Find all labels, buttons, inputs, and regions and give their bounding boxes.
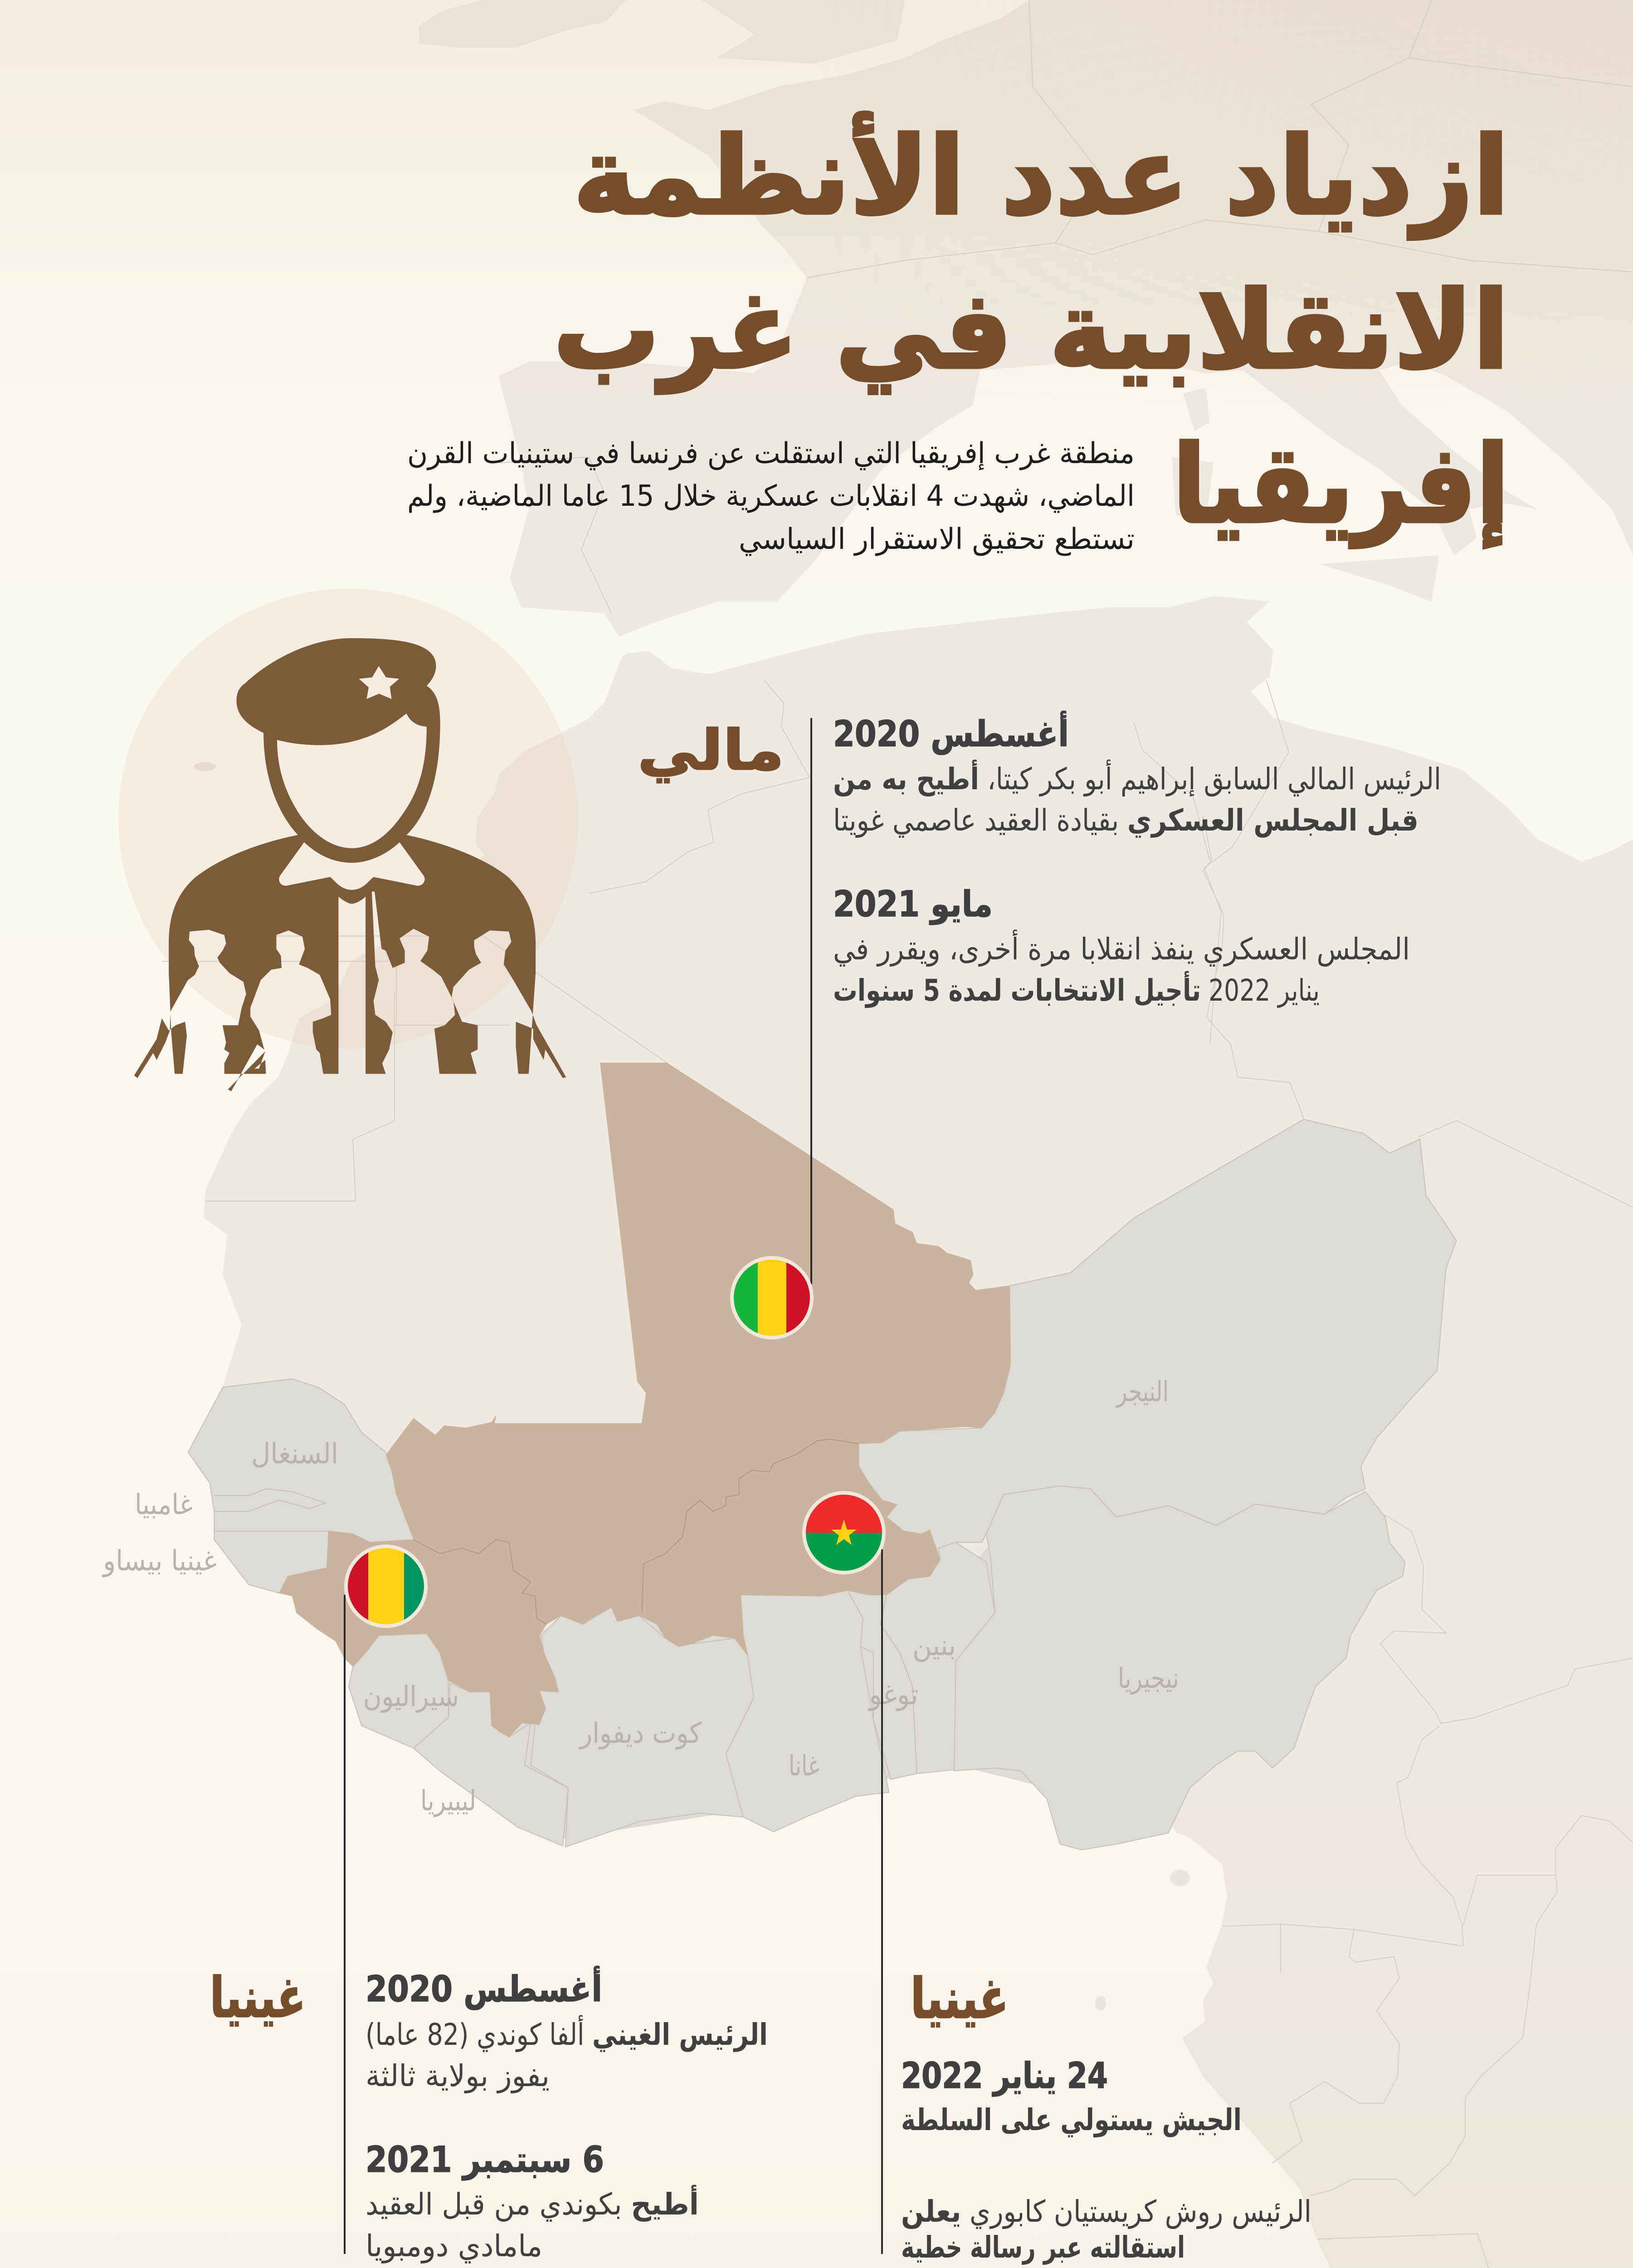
African borders north bbox=[590, 680, 1289, 1043]
title: إفريقيا bbox=[1173, 422, 1509, 548]
event text: president resigns: الرئيس روش كريستيان كابوري يعلن bbox=[901, 2194, 1311, 2229]
icon: Burkina Faso flag bbox=[802, 1491, 886, 1574]
event text: September 2021: مامادي دومبويا bbox=[366, 2229, 542, 2263]
introduction text: منطقة غرب إفريقيا التي استقلت عن فرنسا في ستينيات القرن bbox=[407, 437, 1135, 470]
date: August 2020: أغسطس 2020 bbox=[833, 711, 1069, 755]
event text: army takes power: الجيش يستولي على السلطة bbox=[901, 2102, 1242, 2138]
connector line: Mali bbox=[810, 718, 812, 1284]
Ivory Coast bbox=[531, 1607, 754, 1847]
tan country shape bbox=[279, 1063, 1010, 1737]
event text: August 2020 bbox=[833, 759, 1441, 838]
Sierra Leone bbox=[349, 1634, 448, 1748]
event text: August 2020: الرئيس المالي السابق إبراهيم أبو بكر كيتا، أطيح به من bbox=[833, 759, 1441, 797]
heading: Mali: مالي bbox=[638, 718, 784, 783]
event text: August 2020: يفوز بولاية ثالثة bbox=[366, 2058, 550, 2093]
country label: Senegal: السنغال bbox=[251, 1437, 338, 1470]
heading: Guinea: غينيا bbox=[210, 1965, 306, 2030]
Togo bbox=[848, 1590, 917, 1779]
event text: September 2021 bbox=[366, 2185, 699, 2263]
country label: Ivory Coast: كوت ديفوار bbox=[579, 1716, 702, 1750]
coup countries in tan: Mali, Burkina Faso and Guinea bbox=[279, 1063, 1010, 1737]
title bbox=[553, 112, 1509, 548]
country label: Niger: النيجر bbox=[1116, 1375, 1169, 1408]
event text: May 2021: يناير 2022 تأجيل الانتخابات لمدة 5 سنوات bbox=[833, 971, 1320, 1008]
icon: Mali flag bbox=[730, 1256, 814, 1339]
introduction text bbox=[407, 437, 1135, 556]
event text: August 2020: قبل المجلس العسكري بقيادة العقيد عاصمي غويتا bbox=[833, 803, 1419, 838]
central and southern African borders bbox=[1203, 816, 1633, 2268]
connector line: Burkina Faso bbox=[881, 1549, 883, 2254]
Niger bbox=[859, 1119, 1457, 1559]
introduction text: تستطع تحقيق الاستقرار السياسي bbox=[739, 523, 1135, 556]
panel: Mali timeline bbox=[638, 711, 1441, 1284]
title: الانقلابية في غرب bbox=[553, 268, 1509, 394]
event text: president resigns bbox=[901, 2194, 1311, 2265]
country label: Togo: توغو bbox=[868, 1678, 918, 1711]
country label: Ghana: غانا bbox=[789, 1749, 819, 1782]
country label: Liberia: ليبيريا bbox=[420, 1784, 476, 1817]
introduction text: الماضي، شهدت 4 انقلابات عسكرية خلال 15 عاما الماضية، ولم bbox=[407, 479, 1135, 513]
Ghana bbox=[726, 1590, 889, 1832]
event text: May 2021: المجلس العسكري ينفذ انقلابا مرة أخرى، ويقرر في bbox=[833, 929, 1410, 967]
panel: Guinea timeline bbox=[210, 1595, 768, 2263]
grey underlay closing gaps between countries bbox=[353, 1528, 1090, 1838]
Europe land mass bbox=[419, 0, 1633, 636]
small islands bbox=[194, 762, 1190, 2010]
country label: Benin: بنين bbox=[912, 1629, 956, 1662]
date: August 2020: أغسطس 2020 bbox=[366, 1966, 602, 2010]
date: 24 January 2022: 24 يناير 2022 bbox=[901, 2056, 1108, 2097]
icon: officer with soldiers silhouette bbox=[118, 589, 578, 1091]
Guinea-Bissau bbox=[214, 1531, 329, 1593]
connector line: Guinea bbox=[344, 1595, 346, 2254]
country label: Guinea-Bissau: غينيا بيساو bbox=[102, 1544, 217, 1577]
event text: August 2020: الرئيس الغيني ألفا كوندي (82 عاما) bbox=[366, 2015, 768, 2052]
Africa land mass bbox=[204, 596, 1633, 2268]
Sahara and Mauritania borders bbox=[162, 936, 667, 1201]
heading: Burkina Faso entry: غينيا bbox=[911, 1966, 1009, 2031]
country label: Gambia: غامبيا bbox=[135, 1488, 193, 1521]
West Africa map bbox=[102, 1063, 1457, 1850]
title: ازدياد عدد الأنظمة bbox=[573, 112, 1509, 240]
icon: Guinea flag bbox=[344, 1545, 428, 1628]
officer figure bbox=[134, 638, 566, 1091]
event text: May 2021 bbox=[833, 929, 1410, 1008]
Senegal and Gambia bbox=[188, 1379, 415, 1542]
Liberia bbox=[414, 1683, 568, 1846]
country label: Nigeria: نيجيريا bbox=[1118, 1662, 1179, 1695]
date: 6 September 2021: 6 سبتمبر 2021 bbox=[366, 2140, 604, 2180]
Benin bbox=[880, 1542, 995, 1774]
event text: August 2020 bbox=[366, 2015, 768, 2093]
panel: Burkina Faso timeline bbox=[882, 1549, 1311, 2265]
date: May 2021: مايو 2021 bbox=[833, 884, 993, 925]
event text: September 2021: أطيح بكوندي من قبل العقيد bbox=[366, 2185, 699, 2222]
country label: Sierra Leone: سيراليون bbox=[363, 1680, 459, 1713]
event text: president resigns: استقالته عبر رسالة خطية bbox=[901, 2230, 1185, 2265]
backdrop circle bbox=[118, 589, 578, 1049]
Nigeria bbox=[954, 1486, 1405, 1850]
neighbouring countries in grey bbox=[188, 1119, 1457, 1850]
